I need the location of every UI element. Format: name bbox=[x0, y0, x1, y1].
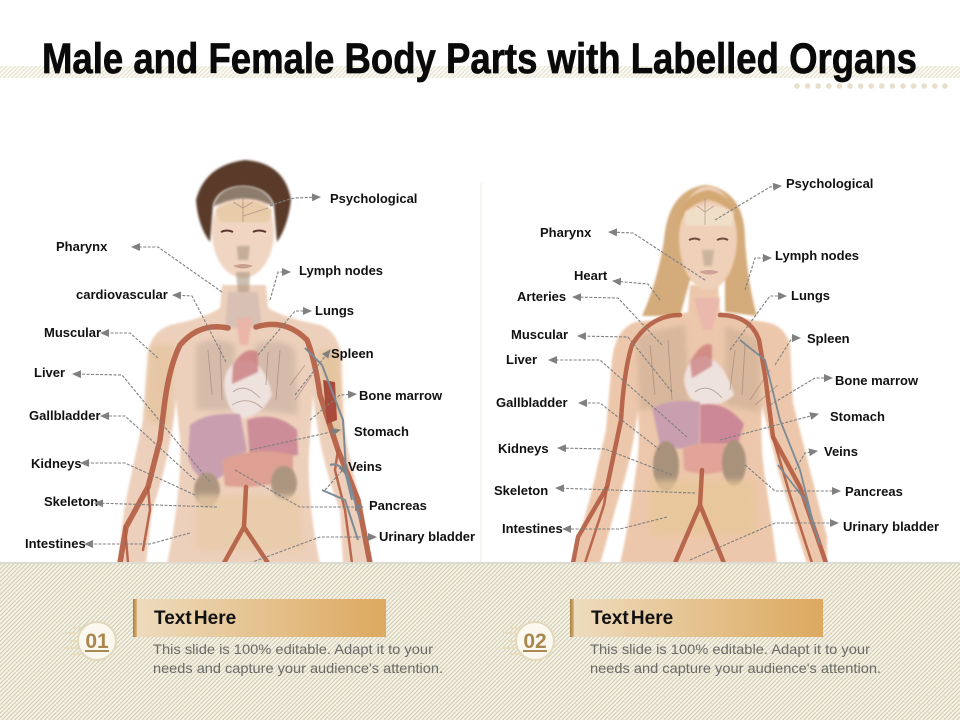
dotted ornament bbox=[794, 83, 948, 89]
male label: Pancreas bbox=[235, 470, 427, 513]
female label: Heart: Heart bbox=[574, 268, 608, 283]
male label: Psychological: Psychological bbox=[330, 191, 417, 206]
male label: Bone marrow bbox=[310, 388, 443, 420]
icon: number badge 01: 01 bbox=[85, 630, 109, 653]
male label: Intestines: Intestines bbox=[25, 536, 86, 551]
male label: Lungs bbox=[258, 303, 354, 355]
male label: Intestines bbox=[25, 533, 190, 551]
female label: Skeleton bbox=[494, 483, 695, 498]
female label: Arteries bbox=[517, 289, 662, 345]
male label: Gallbladder bbox=[29, 408, 195, 480]
heading bar 01: Text Here bbox=[154, 608, 236, 629]
item 01 bbox=[64, 599, 443, 676]
female label: Lungs bbox=[730, 288, 830, 350]
female label: Urinary bladder bbox=[690, 519, 939, 560]
male label: Pharynx bbox=[56, 239, 222, 292]
female label: Arteries: Arteries bbox=[517, 289, 566, 304]
icon: number badge 01 bbox=[64, 622, 116, 660]
male label: Veins bbox=[325, 459, 382, 490]
male label: Muscular bbox=[44, 325, 158, 358]
female label: Pharynx bbox=[540, 225, 705, 280]
description 02 bbox=[590, 641, 881, 676]
female label: Lymph nodes bbox=[745, 248, 859, 290]
male figure anatomy bbox=[118, 160, 372, 564]
female label: Kidneys bbox=[498, 441, 672, 475]
male label: Urinary bladder: Urinary bladder bbox=[379, 529, 475, 544]
female label: Urinary bladder: Urinary bladder bbox=[843, 519, 939, 534]
male label: Pancreas: Pancreas bbox=[369, 498, 427, 513]
male label: Liver bbox=[34, 365, 210, 482]
description 02: This slide is 100% editable. Adapt it to your bbox=[590, 641, 870, 657]
male label: Liver: Liver bbox=[34, 365, 65, 380]
female label: Pancreas bbox=[745, 465, 903, 499]
female label: Spleen: Spleen bbox=[807, 331, 850, 346]
female label: Stomach bbox=[720, 409, 885, 440]
description 01: needs and capture your audience's attention. bbox=[153, 660, 443, 676]
male label: Stomach: Stomach bbox=[354, 424, 409, 439]
male label: Kidneys: Kidneys bbox=[31, 456, 82, 471]
female label: Stomach: Stomach bbox=[830, 409, 885, 424]
female label: Kidneys: Kidneys bbox=[498, 441, 549, 456]
male label: Stomach bbox=[250, 424, 409, 450]
male label: Gallbladder: Gallbladder bbox=[29, 408, 101, 423]
description 01: This slide is 100% editable. Adapt it to your bbox=[153, 641, 433, 657]
female label: Liver bbox=[506, 352, 687, 437]
male label: Psychological bbox=[270, 191, 417, 206]
female label: Psychological bbox=[715, 176, 873, 220]
male label: Bone marrow: Bone marrow bbox=[359, 388, 443, 403]
male label: Urinary bladder bbox=[250, 529, 475, 563]
female label: Intestines bbox=[502, 517, 667, 536]
bottom striped panel bbox=[0, 562, 960, 720]
female label: Lungs: Lungs bbox=[791, 288, 830, 303]
male label: Veins: Veins bbox=[348, 459, 382, 474]
female label: Psychological: Psychological bbox=[786, 176, 873, 191]
title stripe band bbox=[0, 66, 960, 78]
item 02 bbox=[502, 599, 881, 676]
icon: number badge 02: 02 bbox=[523, 630, 547, 653]
heading bar 02: Text Here bbox=[591, 608, 673, 629]
female label: Lymph nodes: Lymph nodes bbox=[775, 248, 859, 263]
female label: Gallbladder bbox=[496, 395, 660, 450]
male label: Skeleton: Skeleton bbox=[44, 494, 98, 509]
female label: Pancreas: Pancreas bbox=[845, 484, 903, 499]
female label: Pharynx: Pharynx bbox=[540, 225, 592, 240]
male label: cardiovascular: cardiovascular bbox=[76, 287, 168, 302]
male label: Skeleton bbox=[44, 494, 217, 509]
female label: Bone marrow bbox=[770, 373, 919, 405]
female label: Veins bbox=[795, 444, 858, 470]
male label: Spleen bbox=[295, 346, 374, 395]
female label: Gallbladder: Gallbladder bbox=[496, 395, 568, 410]
female label: Veins: Veins bbox=[824, 444, 858, 459]
male label: Kidneys bbox=[31, 456, 195, 495]
female label: Intestines: Intestines bbox=[502, 521, 563, 536]
heading bar 01 bbox=[133, 599, 386, 637]
heading bar 02 bbox=[570, 599, 823, 637]
male label: cardiovascular bbox=[76, 287, 226, 362]
female label: Muscular bbox=[511, 327, 672, 392]
icon: number badge 02 bbox=[502, 622, 554, 660]
male label: Lymph nodes: Lymph nodes bbox=[299, 263, 383, 278]
female label: Spleen bbox=[775, 331, 850, 365]
male label: Muscular: Muscular bbox=[44, 325, 101, 340]
male label: Pharynx: Pharynx bbox=[56, 239, 108, 254]
female figure anatomy bbox=[572, 185, 827, 564]
female label: Skeleton: Skeleton bbox=[494, 483, 548, 498]
male label: Lymph nodes bbox=[270, 263, 383, 300]
description 01 bbox=[153, 641, 443, 676]
male label: Spleen: Spleen bbox=[331, 346, 374, 361]
female label: Muscular: Muscular bbox=[511, 327, 568, 342]
female label: Liver: Liver bbox=[506, 352, 537, 367]
female label: Heart bbox=[574, 268, 660, 300]
male label: Lungs: Lungs bbox=[315, 303, 354, 318]
description 02: needs and capture your audience's attention. bbox=[590, 660, 881, 676]
female label: Bone marrow: Bone marrow bbox=[835, 373, 919, 388]
